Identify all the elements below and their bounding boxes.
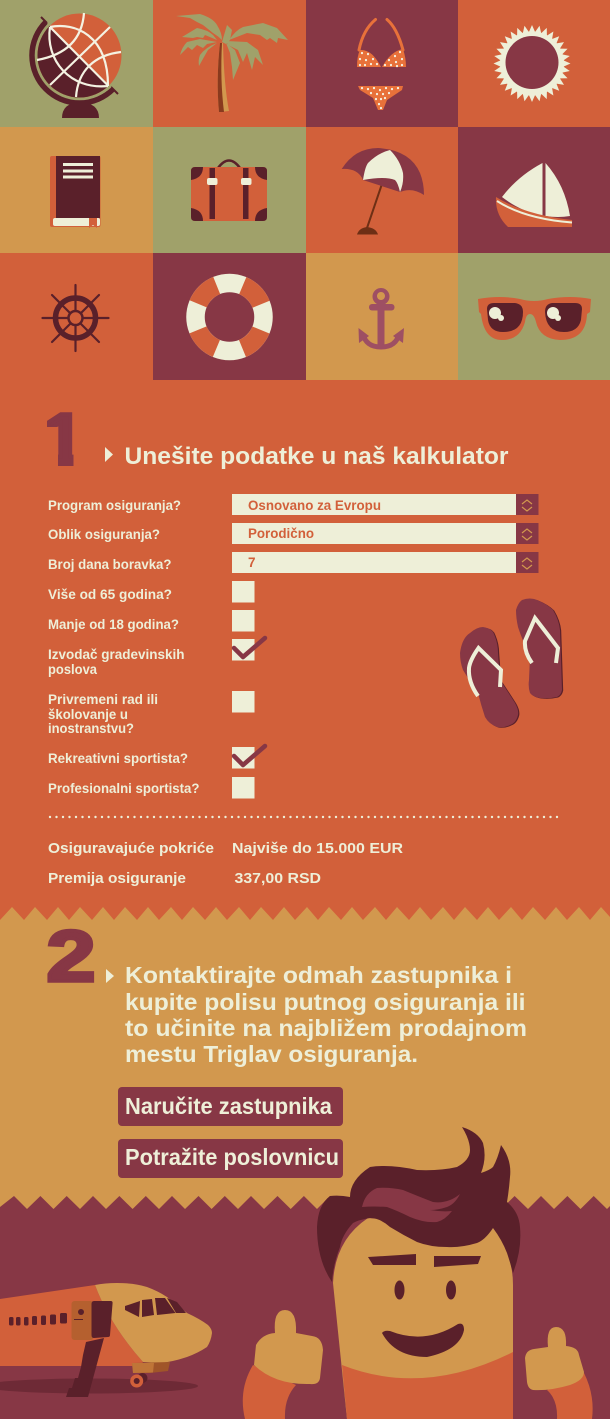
left hand xyxy=(254,1310,323,1384)
checkbox: privremeni rad xyxy=(232,691,254,712)
icon: life ring xyxy=(196,283,264,351)
icon: sunglasses xyxy=(478,297,591,340)
checkbox: manje od 18 xyxy=(232,610,254,632)
result: premium xyxy=(48,870,321,887)
checkbox: profesionalni xyxy=(232,777,254,798)
form labels: Više od 65 godina? xyxy=(48,587,172,602)
select: broj dana: 7 xyxy=(248,555,256,570)
select: oblik: Porodično xyxy=(248,526,314,541)
icon: ship wheel xyxy=(42,285,108,351)
character: smiling man xyxy=(243,1127,593,1419)
select: program xyxy=(232,494,538,515)
arrow: step 1 xyxy=(105,447,113,462)
button: potražite poslovnicu: Potražite poslovnicu xyxy=(125,1144,339,1170)
icon: anchor xyxy=(358,288,404,348)
button: potražite poslovnicu xyxy=(118,1139,343,1178)
checkbox: rekreativni checked xyxy=(232,746,265,768)
step number 1: 1 xyxy=(44,400,84,480)
result: premium: 337,00 RSD xyxy=(234,870,321,887)
heading: step 2: kupite polisu putnog osiguranja ili xyxy=(125,989,526,1015)
form labels: školovanje u xyxy=(48,707,128,722)
shirt xyxy=(342,1352,513,1419)
panel: bottom scene xyxy=(0,1127,610,1419)
icon: airplane xyxy=(0,1283,212,1397)
icon: globe xyxy=(32,13,122,118)
select: oblik xyxy=(232,523,538,544)
heading: step 2: mestu Triglav osiguranja. xyxy=(125,1041,418,1067)
result: coverage xyxy=(48,840,403,857)
result: coverage: Najviše do 15.000 EUR xyxy=(232,840,403,857)
form labels: inostranstvu? xyxy=(48,721,134,736)
form labels: Rekreativni sportista? xyxy=(48,751,188,766)
checkbox: vise od 65 xyxy=(232,581,254,602)
icon: bikini xyxy=(357,20,406,110)
icon: sun xyxy=(494,25,570,102)
result: coverage: Osiguravajuće pokriće xyxy=(48,840,214,857)
heading: step 2: Kontaktirajte odmah zastupnika i xyxy=(125,962,512,988)
panel: step 2 contact xyxy=(0,907,610,1215)
form labels: Privremeni rad ili xyxy=(48,692,158,707)
icon: flip flops xyxy=(460,598,563,728)
form labels: poslova xyxy=(48,662,97,677)
eyes xyxy=(394,1280,456,1300)
select: program: Osnovano za Evropu xyxy=(248,498,381,513)
form labels xyxy=(48,498,200,796)
form labels: Oblik osiguranja? xyxy=(48,527,160,542)
panel: step 1 calculator xyxy=(47,412,564,886)
icon: suitcase xyxy=(191,160,267,221)
heading: step 2: to učinite na najbližem prodajnom xyxy=(125,1015,527,1041)
icon: beach umbrella xyxy=(342,148,424,234)
icon: sailboat xyxy=(496,163,572,227)
form labels: Program osiguranja? xyxy=(48,498,181,513)
button: naručite zastupnika xyxy=(118,1087,343,1126)
form labels: Profesionalni sportista? xyxy=(48,781,200,796)
left arm xyxy=(243,1365,296,1419)
hair highlight xyxy=(362,1188,460,1222)
icon: book xyxy=(50,156,100,228)
eyebrows xyxy=(368,1254,481,1267)
form labels: Broj dana boravka? xyxy=(48,557,172,572)
heading: step 1: Unešite podatke u naš kalkulator xyxy=(124,443,508,470)
checkbox: izvodac checked xyxy=(232,638,265,660)
mouth xyxy=(382,1324,464,1357)
hair xyxy=(317,1127,520,1282)
right arm xyxy=(547,1373,593,1419)
step number 2: 2 xyxy=(46,917,96,997)
heading: step 2 xyxy=(125,962,527,1067)
select: broj dana xyxy=(232,552,538,573)
icon grid panel xyxy=(0,0,610,380)
icon: palm tree xyxy=(176,14,288,112)
dotted divider xyxy=(50,816,561,818)
button: naručite zastupnika: Naručite zastupnika xyxy=(125,1093,332,1119)
right hand xyxy=(525,1327,584,1390)
form labels: Izvodač gradevinskih xyxy=(48,647,184,662)
face xyxy=(333,1218,513,1419)
form labels: Manje od 18 godina? xyxy=(48,617,179,632)
arrow: step 2 xyxy=(106,969,114,983)
result: premium: Premija osiguranje xyxy=(48,870,186,887)
